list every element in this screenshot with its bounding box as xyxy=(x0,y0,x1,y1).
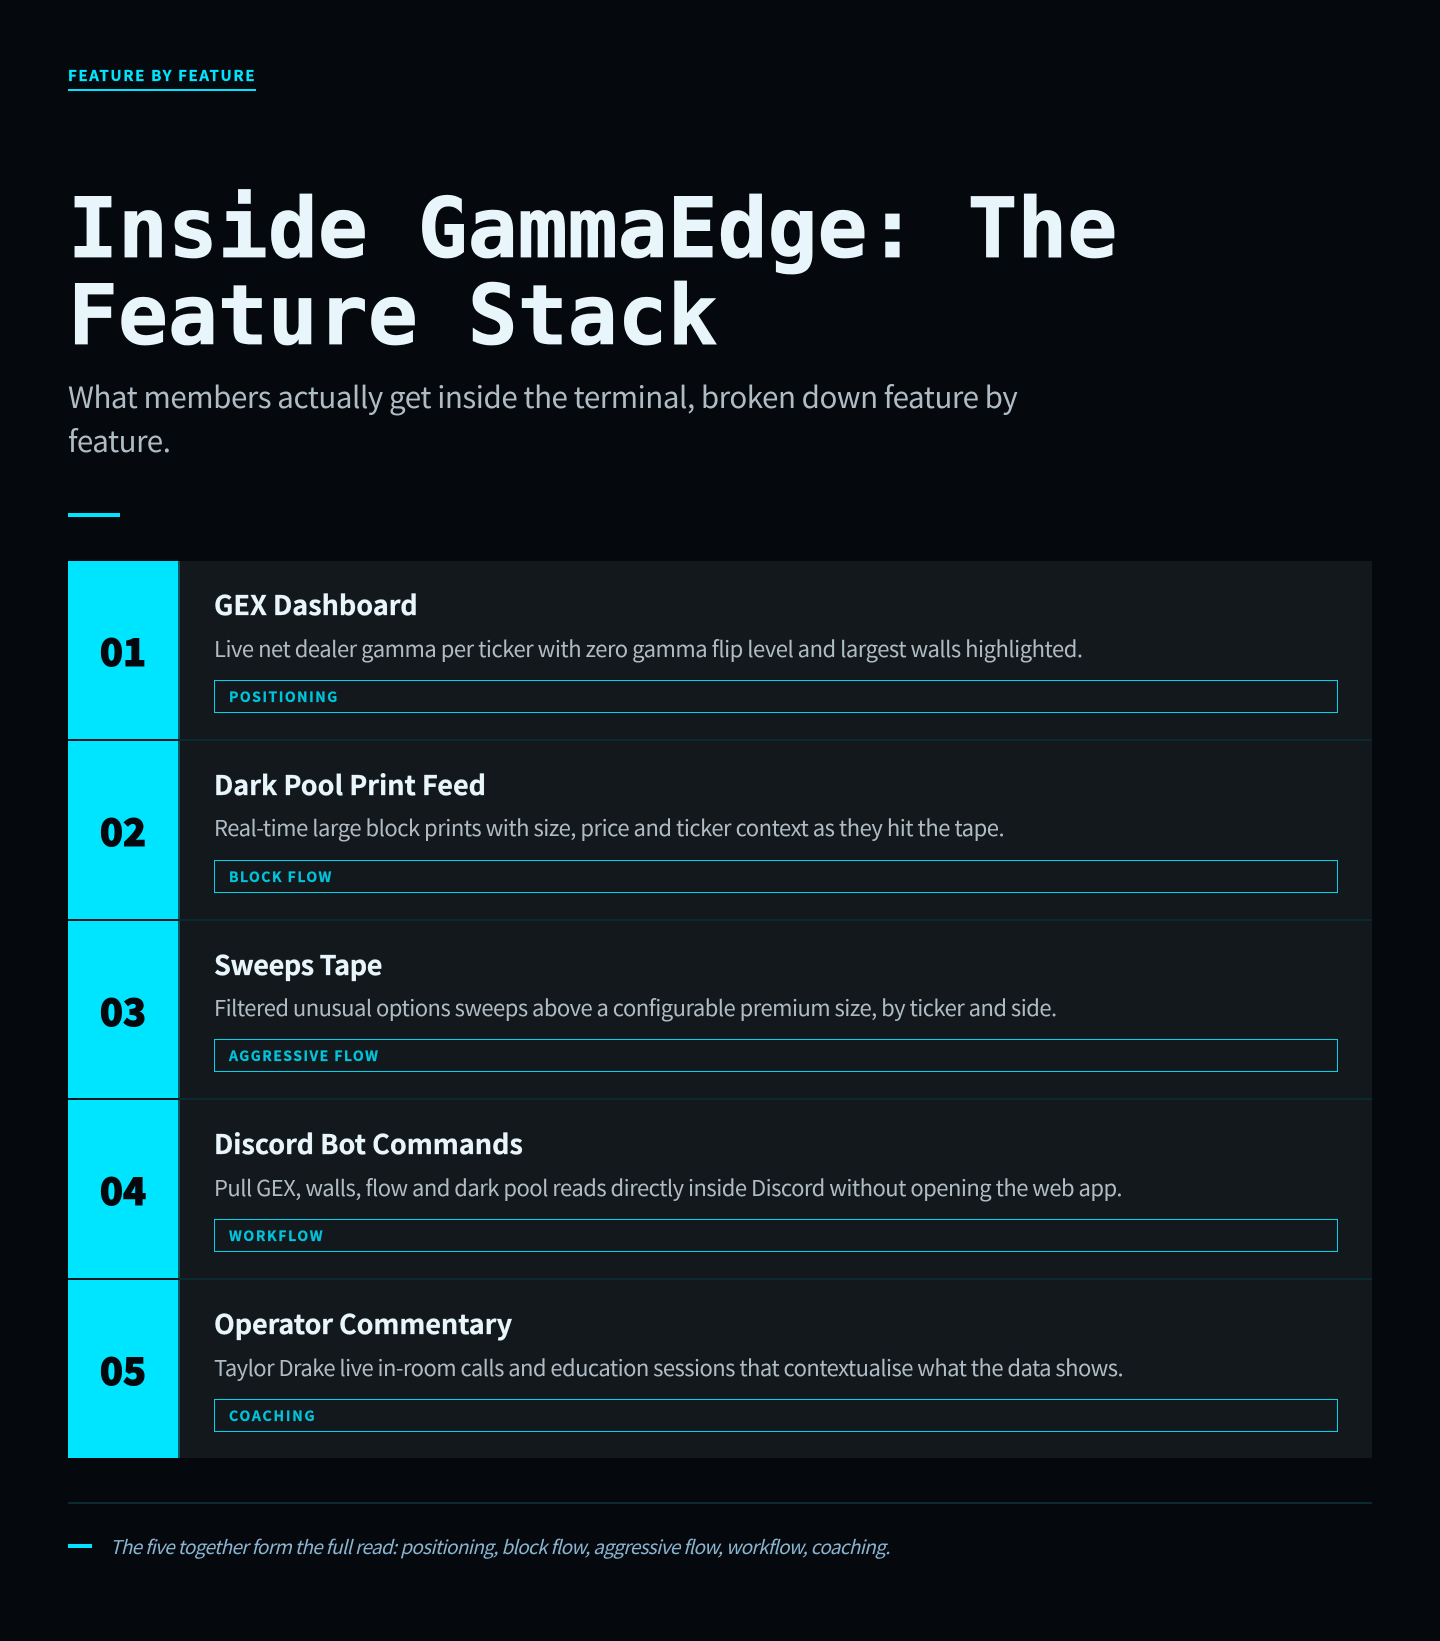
title xyxy=(68,180,1117,364)
title: Inside GammaEdge: The xyxy=(68,180,1117,277)
number 01: 01 xyxy=(100,622,146,677)
subtitle: What members actually get inside the terminal, broken down feature by xyxy=(68,375,1017,417)
feature row 02 xyxy=(68,741,1372,919)
feature row 03 xyxy=(68,921,1372,1098)
number 04: 04 xyxy=(100,1161,146,1216)
feature name: Dark Pool Print Feed xyxy=(214,764,486,803)
tag: POSITIONING xyxy=(229,687,339,707)
number 02 xyxy=(68,741,178,919)
tag: WORKFLOW xyxy=(229,1226,324,1246)
title: Feature Stack xyxy=(68,267,718,364)
footer note: The five together form the full read: positioning, block flow, aggressive flow, workflow, coaching. xyxy=(110,1533,890,1560)
number 03: 03 xyxy=(100,982,146,1037)
number 04 xyxy=(68,1100,178,1278)
feature row 04 xyxy=(68,1100,1372,1278)
tag xyxy=(214,1039,1338,1072)
feature description: Real-time large block prints with size, price and ticker context as they hit the tape. xyxy=(214,811,1004,843)
accent rule xyxy=(68,513,120,517)
subtitle: feature. xyxy=(68,419,170,461)
tag: AGGRESSIVE FLOW xyxy=(229,1046,379,1066)
tag: COACHING xyxy=(229,1406,316,1426)
number 03 xyxy=(68,921,178,1098)
number 05 xyxy=(68,1280,178,1458)
feature description: Pull GEX, walls, flow and dark pool reads directly inside Discord without opening the web app. xyxy=(214,1171,1122,1203)
feature row 01 xyxy=(68,561,1372,739)
number 05: 05 xyxy=(100,1341,146,1396)
tag xyxy=(214,680,1338,713)
tag xyxy=(214,1219,1338,1252)
feature name: GEX Dashboard xyxy=(214,584,418,623)
number 01 xyxy=(68,561,178,739)
feature description: Taylor Drake live in-room calls and education sessions that contextualise what the data shows. xyxy=(214,1351,1123,1383)
tag xyxy=(214,1399,1338,1432)
feature name: Discord Bot Commands xyxy=(214,1123,523,1162)
feature description: Filtered unusual options sweeps above a configurable premium size, by ticker and side. xyxy=(214,991,1057,1023)
tag: BLOCK FLOW xyxy=(229,867,333,887)
feature description: Live net dealer gamma per ticker with zero gamma flip level and largest walls highlighted. xyxy=(214,632,1083,664)
number 02: 02 xyxy=(100,802,146,857)
eyebrow label: FEATURE BY FEATURE xyxy=(68,65,256,86)
footer dash xyxy=(68,1544,92,1548)
feature name: Sweeps Tape xyxy=(214,944,382,983)
subtitle xyxy=(68,375,1018,461)
feature name: Operator Commentary xyxy=(214,1303,512,1342)
tag xyxy=(214,860,1338,893)
feature row 05 xyxy=(68,1280,1372,1458)
